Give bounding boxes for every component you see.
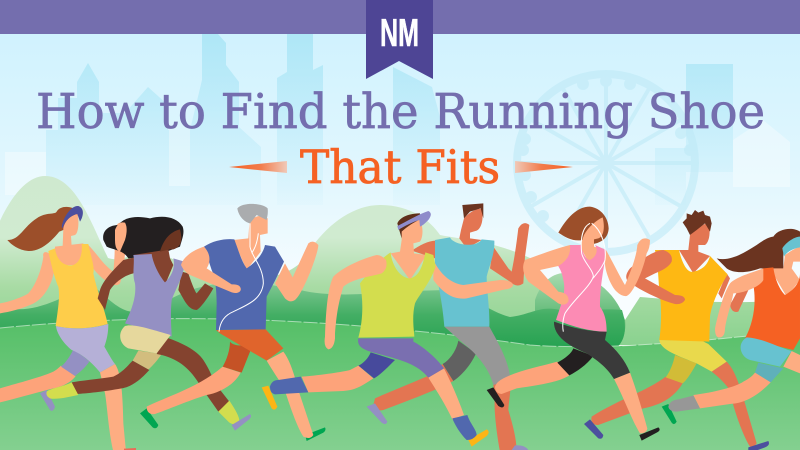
top header bar	[0, 0, 800, 34]
runner 4: lime tank	[270, 211, 513, 447]
sky background	[0, 34, 800, 334]
title line 1: How to Find the Running Shoe	[36, 84, 765, 140]
logo: NM: NM	[380, 12, 419, 55]
runner 4 rear shoe	[262, 386, 277, 410]
runners	[0, 203, 800, 450]
decorative arrow left	[229, 161, 287, 173]
runner 7: gold tank	[584, 210, 769, 450]
runner 8: orange tank	[668, 229, 800, 412]
runner 3: blue shirt	[147, 204, 326, 441]
ferris wheel	[517, 74, 696, 252]
runner 2: purple tank	[46, 217, 251, 431]
ground	[0, 319, 800, 450]
background hills	[0, 176, 800, 352]
city skyline	[5, 34, 790, 205]
logo ribbon	[366, 0, 433, 79]
runner 5: teal tank	[367, 203, 529, 450]
runner 1: yellow tank	[0, 206, 136, 450]
title line 2: That Fits	[300, 140, 500, 194]
decorative arrow right	[515, 161, 573, 173]
runner 6: pink tank	[487, 207, 660, 441]
